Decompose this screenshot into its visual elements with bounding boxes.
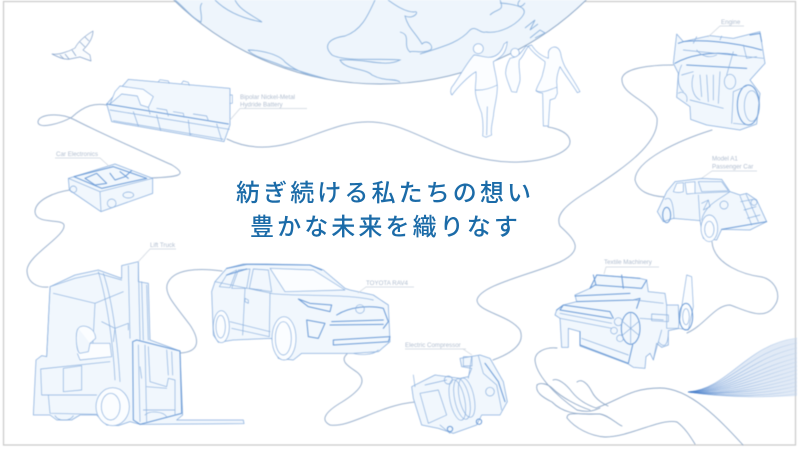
panel: battery: [107, 79, 232, 142]
label: Model A1: Model A1: [712, 156, 738, 162]
panel: family: [451, 42, 580, 137]
thread: flowing line connecting all products: [27, 65, 778, 425]
car electronics illustration: [68, 164, 153, 212]
icon: open hand: [535, 348, 743, 445]
label: engine: [708, 19, 744, 37]
label: textile machinery: [604, 259, 659, 274]
label: Model A1: Passenger Car: [712, 164, 753, 170]
label: RAV4: TOYOTA RAV4: [366, 280, 409, 287]
textile machinery illustration: [555, 275, 693, 368]
child: [506, 46, 528, 92]
panel: RAV4: [212, 264, 390, 360]
globe: [173, 0, 587, 86]
label: car electronics: Car Electronics: [56, 151, 98, 158]
panel: Model A1: [657, 178, 767, 242]
label: textile machinery: Textile Machinery: [604, 259, 653, 266]
Model A1 car illustration: [657, 178, 767, 242]
panel: engine: [673, 32, 765, 130]
lift truck illustration: [33, 262, 244, 426]
ribbon of thread: [688, 338, 797, 397]
panel: textile machinery: [555, 275, 693, 368]
label: compressor: [405, 342, 472, 355]
title line 1: 紡ぎ続ける私たちの想い: [236, 180, 534, 207]
label: compressor: Electric Compressor: [405, 342, 461, 349]
man: [451, 42, 507, 137]
title line 2: 豊かな未来を織りなす: [250, 214, 521, 241]
RAV4 illustration: [212, 264, 390, 360]
label: lift truck: [138, 242, 176, 262]
panel: compressor: [412, 355, 507, 433]
label: lift truck: Lift Truck: [150, 242, 176, 249]
label: car electronics: [55, 151, 110, 167]
compressor illustration: [412, 355, 507, 433]
label: RAV4: [358, 280, 414, 293]
label: battery: Hydride Battery: [240, 102, 284, 108]
battery illustration: [107, 79, 232, 142]
woman: [528, 45, 580, 126]
label: engine: Engine: [721, 19, 741, 26]
label: Model A1: [702, 156, 757, 178]
panel: lift truck: [33, 262, 244, 426]
label: battery: Bipolar Nickel-Metal: [240, 94, 295, 101]
panel: car electronics: [68, 164, 153, 212]
icon: dove: [52, 31, 93, 61]
label: battery: [230, 94, 307, 120]
engine illustration: [673, 32, 765, 130]
